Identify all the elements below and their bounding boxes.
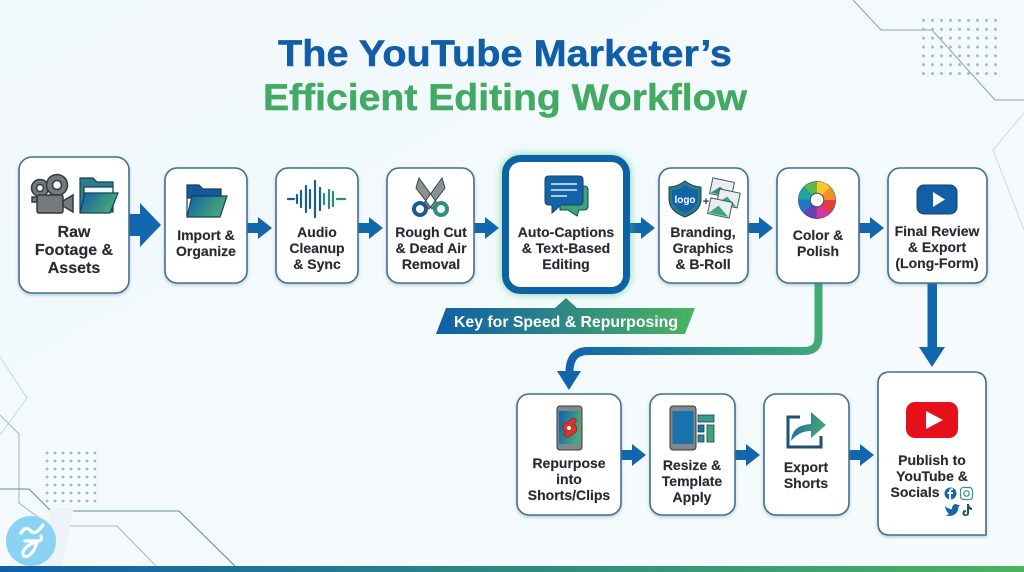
arrow: captions to branding [630,217,655,239]
callout: key for speed and repurposing [436,298,695,334]
text: import and organize: Organize [176,243,236,259]
text: import and organize: Import & [177,227,235,243]
arrow: raw footage to import [129,203,161,247]
icon: twitter [945,504,960,516]
icon: folder [187,185,227,217]
icon: waveform [288,181,345,217]
arrow: final review to publish [919,283,945,367]
panel: rough cut and dead air removal [387,168,474,283]
icon: assets folder [80,178,118,213]
panel: repurpose into shorts [517,394,621,515]
icon: phone with shorts logo [557,406,582,450]
icon: chat bubbles [545,176,588,216]
icon: facebook [944,488,956,500]
text: branding graphics b-roll: Branding, [670,224,736,240]
text: publish to youtube and socials: YouTube & [896,468,968,484]
arrow: repurpose to resize [621,444,646,466]
icon: share export arrow [788,412,826,447]
icon: phone and templates [670,406,714,450]
arrow: branding to color [748,217,773,239]
arrow: export to publish [849,444,874,466]
callout: key for speed and repurposing: Key for Speed & Repurposing [454,314,678,331]
text: color and polish: Color & [793,227,843,243]
text: raw footage and assets: Assets [48,260,100,277]
title [263,33,747,118]
footer gradient bar [0,566,1024,572]
text: branding graphics b-roll: Graphics [673,240,734,256]
panel: import and organize [165,168,247,283]
text: audio cleanup and sync: Cleanup [289,240,345,256]
arrow: rough cut to captions [474,217,499,239]
icon: scissors [414,178,447,215]
text: resize and template apply: Template [662,473,722,489]
panel: raw footage and assets [19,157,129,293]
icon: film camera [32,174,73,213]
panel: publish to youtube and socials [878,372,986,535]
icon: brand logo badge [6,516,56,566]
arrow: audio to rough cut [358,217,383,239]
icon: youtube logo [906,402,958,438]
text: color and polish: Polish [797,243,839,259]
panel: color and polish [777,168,859,283]
text: export shorts: Export [784,459,829,475]
icon: play button [917,185,957,214]
text: rough cut and dead air removal: Removal [402,256,460,272]
text: auto-captions: Editing [542,256,590,272]
panel: resize and template apply [650,394,735,515]
text: branding graphics b-roll: & B-Roll [675,256,731,272]
text: export shorts: Shorts [784,475,828,491]
text: final review and export: & Export [908,239,967,255]
text: audio cleanup and sync: & Sync [293,256,341,272]
arrow: import to audio [247,217,272,239]
text: final review and export: (Long-Form) [895,255,979,271]
icon: images [708,178,740,218]
arrow: color to final review [859,217,884,239]
panel: branding, graphics and b-roll [659,168,748,283]
text: repurpose into shorts/clips: Repurpose [532,455,606,471]
arrow: resize to export [735,444,760,466]
text: repurpose into shorts/clips: into [556,471,582,487]
icon: plus: + [703,196,709,208]
text: publish to youtube and socials: Publish to [898,452,966,468]
panel: export shorts [764,394,849,515]
icon: instagram [960,488,972,500]
icon: tiktok [962,504,972,516]
arrow: color to repurpose connector [557,283,818,390]
panel: auto-captions highlighted [506,158,626,290]
icon: logo shield: logo [674,195,696,206]
icon: color wheel [798,181,836,219]
text: resize and template apply: Resize & [663,457,721,473]
text: raw footage and assets: Raw [58,224,91,241]
panel: final review and export [888,168,987,283]
title: The YouTube Marketer’s [278,33,732,74]
text: raw footage and assets: Footage & [35,242,114,259]
text: audio cleanup and sync: Audio [297,224,337,240]
text: final review and export: Final Review [895,223,980,239]
text: rough cut and dead air removal: & Dead Air [395,240,467,256]
panel: audio cleanup and sync [276,168,358,283]
text: publish to youtube and socials: Socials [890,484,940,500]
text: auto-captions: Auto-Captions [518,224,614,240]
text: rough cut and dead air removal: Rough Cut [395,224,467,240]
text: repurpose into shorts/clips: Shorts/Clips [528,487,610,503]
text: resize and template apply: Apply [673,489,712,505]
title: Efficient Editing Workflow [263,77,747,118]
text: auto-captions: & Text-Based [522,240,610,256]
